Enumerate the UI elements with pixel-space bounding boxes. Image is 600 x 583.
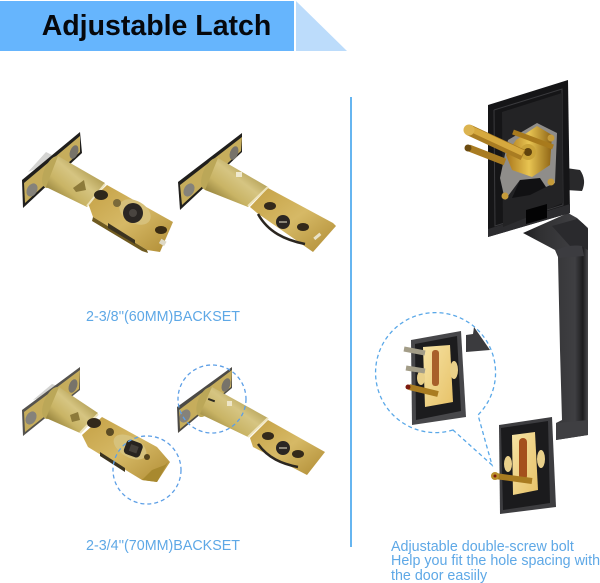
silver mounting plate (500, 123, 557, 200)
60mm label: 2-3/8''(60MM)BACKSET (86, 309, 240, 325)
header banner (0, 1, 347, 51)
handle grip (523, 213, 588, 440)
door handle (464, 80, 588, 514)
dashed circle: tail detail (113, 436, 181, 504)
text: Help you fit the hole spacing with (391, 553, 600, 569)
gold assembly (506, 126, 552, 177)
bottom escutcheon (491, 417, 556, 514)
latch: 60mm back (178, 133, 336, 252)
latch: 60mm front (22, 132, 173, 253)
bubble contents (404, 327, 490, 425)
header triangle (296, 1, 347, 51)
rear knob stub (566, 168, 584, 191)
dashed outline (376, 313, 496, 465)
latch: 70mm front (22, 367, 170, 482)
top escutcheon (464, 80, 570, 237)
callout bubble (376, 313, 496, 465)
70mm label: 2-3/4''(70MM)BACKSET (86, 538, 240, 554)
latch: 70mm back (177, 367, 325, 475)
caption: Adjustable double-screw bolt (391, 539, 574, 555)
vertical divider (350, 97, 352, 547)
dashed circle: plate detail (178, 365, 246, 433)
title: Adjustable Latch (42, 10, 271, 42)
gold bolt (495, 476, 532, 481)
gold bolts (513, 132, 553, 147)
gold slot plate (512, 432, 538, 495)
